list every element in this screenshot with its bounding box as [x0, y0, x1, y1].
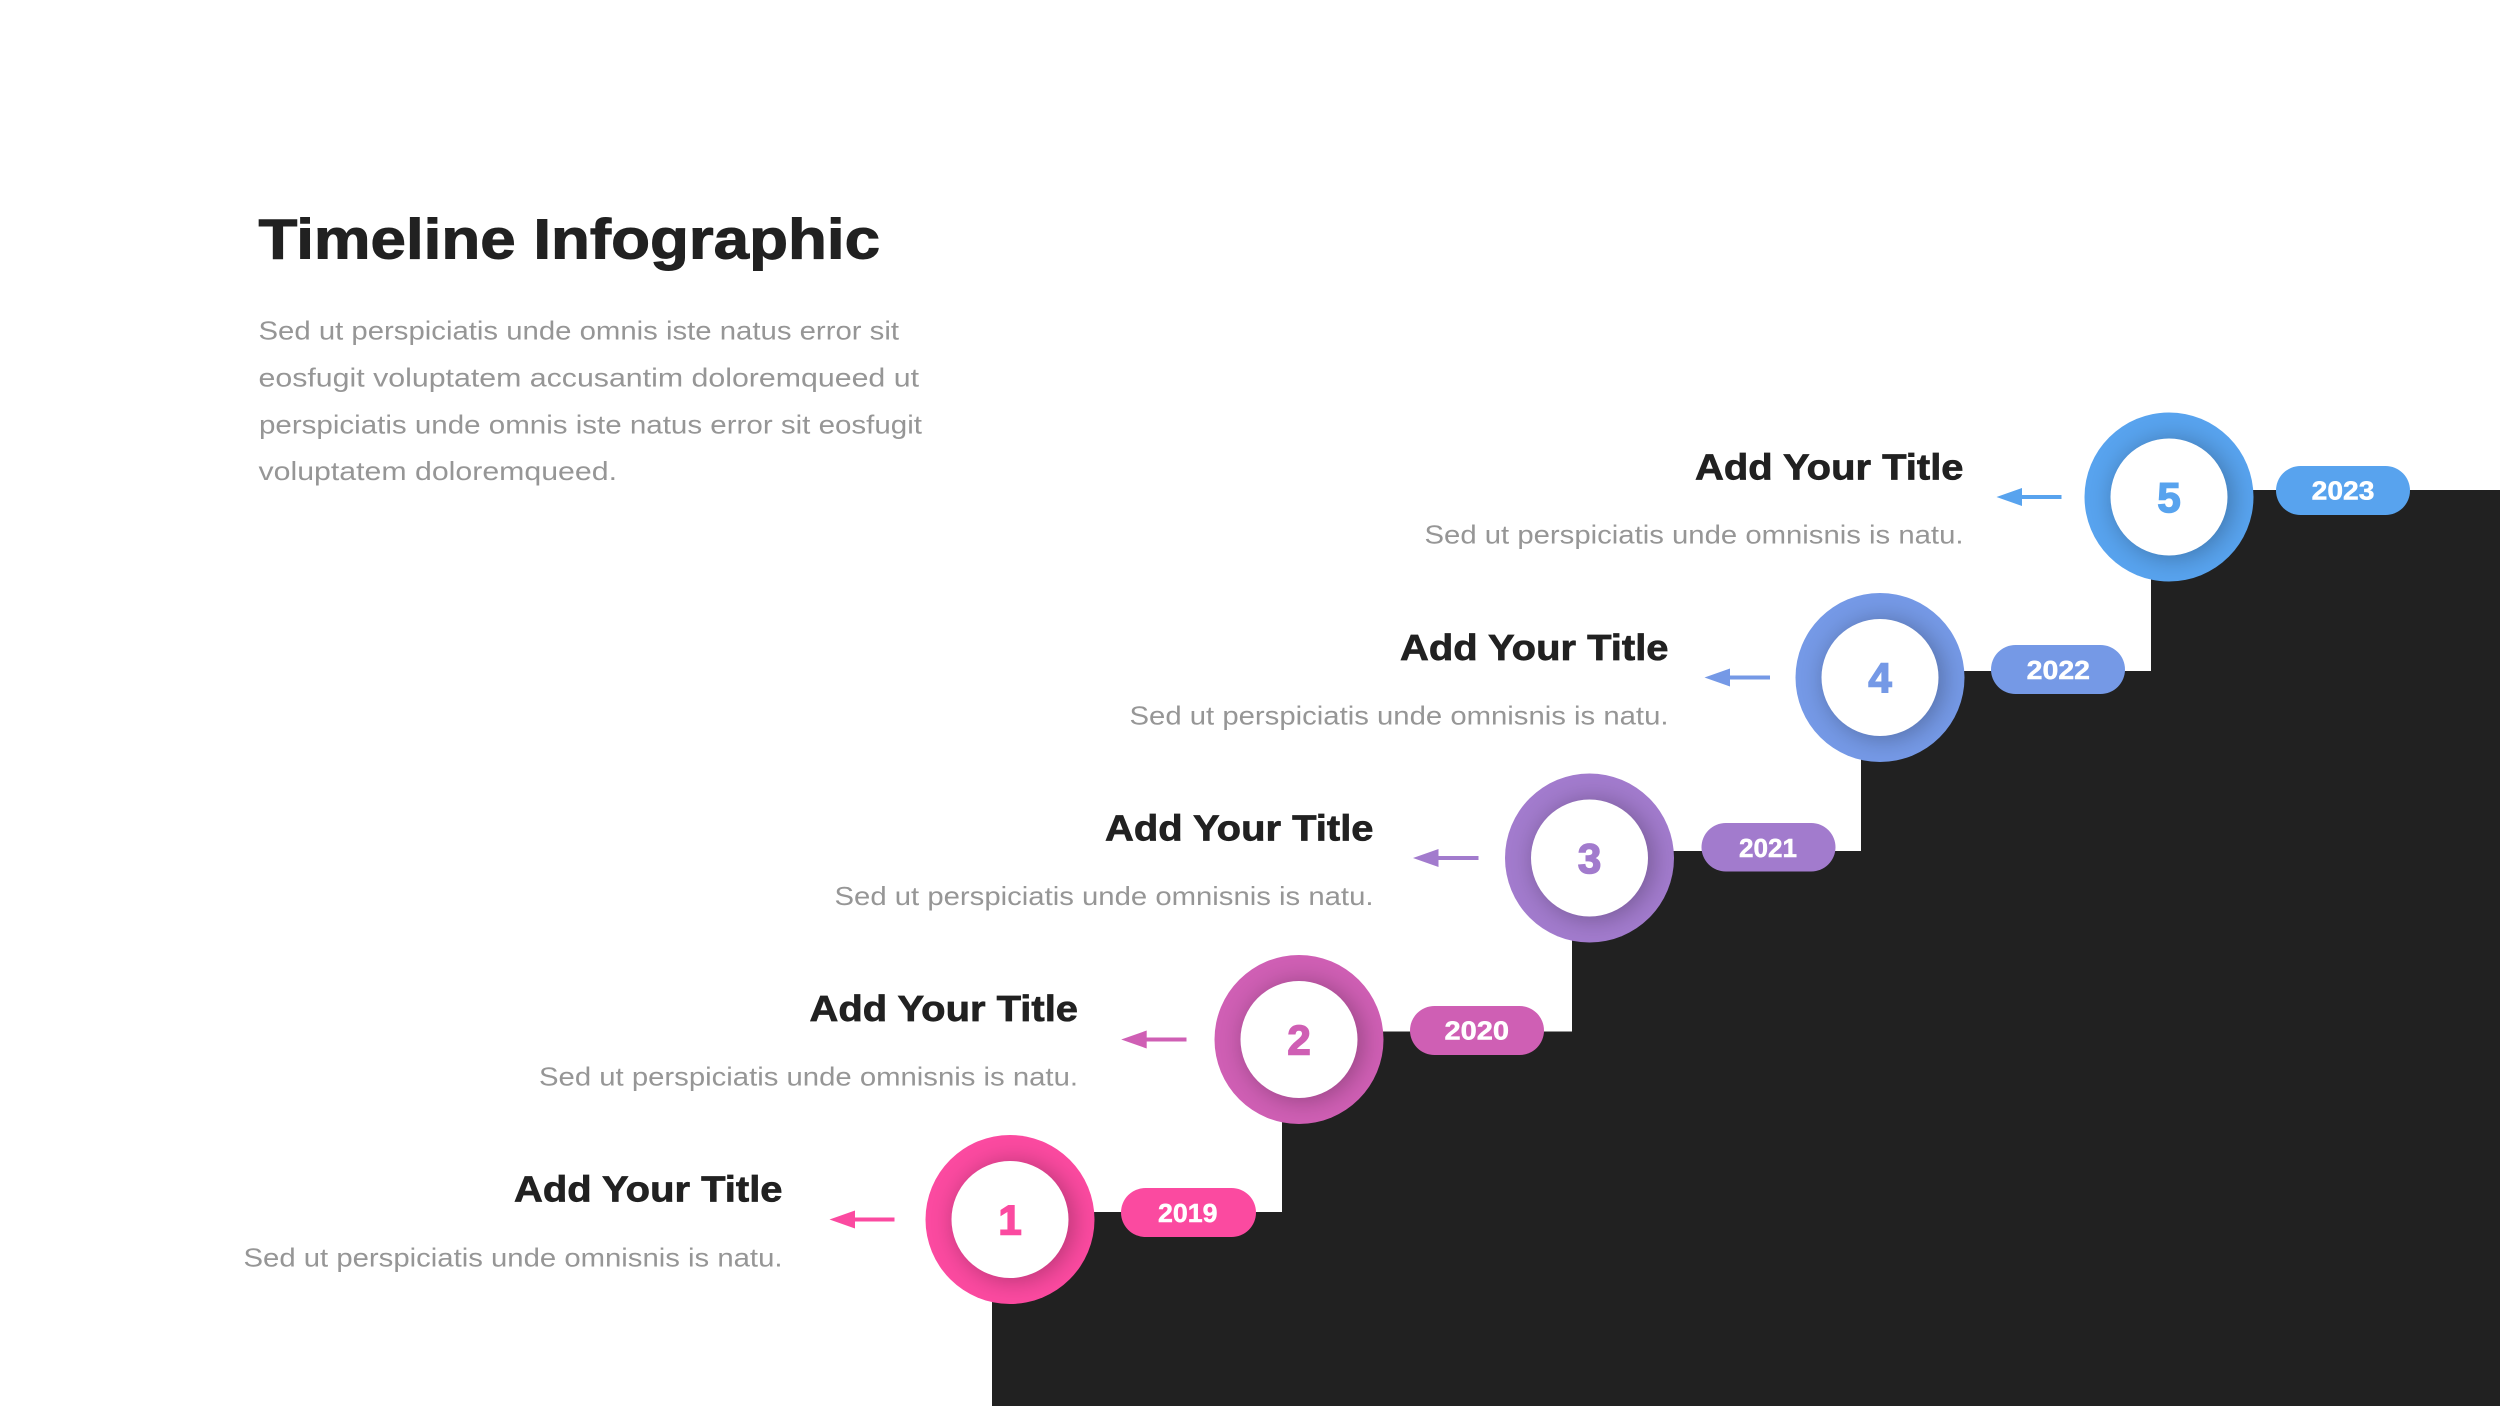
step 4 heading: Add Your Title: [1400, 627, 1668, 668]
step 5: [1424, 412, 2410, 582]
step 1 year pill: 2019: [1158, 1198, 1218, 1228]
step 2 badge: 2: [1287, 1016, 1311, 1064]
dark staircase: [992, 490, 2500, 1406]
step 3 year pill: [1702, 823, 1836, 872]
title: Timeline Infographic: [258, 208, 880, 272]
step 4 year pill: 2022: [2027, 655, 2090, 685]
intro paragraph: [258, 316, 923, 486]
step 1 year pill: [1121, 1188, 1256, 1237]
step 3 badge: [1505, 774, 1674, 942]
step 3 arrow: [1413, 849, 1478, 867]
step 1 badge: [926, 1135, 1094, 1304]
step 5 arrow: [1996, 488, 2062, 506]
step 4 arrow: [1704, 668, 1770, 686]
step 5 description: Sed ut perspiciatis unde omnisnis is natu.: [1424, 520, 1964, 550]
step 1 arrow: [830, 1210, 894, 1228]
step 4 badge: [1796, 593, 1964, 762]
step 3 year pill: 2021: [1739, 833, 1797, 863]
step 2 heading: Add Your Title: [810, 988, 1078, 1029]
step 2 arrow: [1121, 1030, 1186, 1048]
step 3 badge: 3: [1578, 835, 1601, 882]
step 3: [834, 774, 1836, 942]
step 4 year pill: [1991, 645, 2125, 694]
intro paragraph: perspiciatis unde omnis iste natus error sit eosfugit: [259, 410, 923, 440]
step 4 description: Sed ut perspiciatis unde omnisnis is natu.: [1130, 700, 1668, 730]
intro paragraph: voluptatem doloremqueed.: [258, 456, 617, 486]
intro paragraph: eosfugit voluptatem accusantim doloremqueed ut: [258, 362, 920, 392]
step 2: [539, 955, 1544, 1124]
step 4: [1130, 593, 2125, 762]
step 2 year pill: [1410, 1006, 1544, 1055]
step 2 description: Sed ut perspiciatis unde omnisnis is natu.: [539, 1062, 1078, 1092]
step 5 badge: 5: [2157, 474, 2181, 521]
step 5 year pill: [2276, 466, 2410, 515]
step 5 badge: [2084, 412, 2254, 582]
step 2 badge: [1214, 955, 1384, 1124]
step 5 heading: Add Your Title: [1695, 446, 1964, 488]
step 5 year pill: 2023: [2312, 476, 2374, 506]
step 1 heading: Add Your Title: [514, 1168, 782, 1210]
intro paragraph: Sed ut perspiciatis unde omnis iste natus error sit: [258, 316, 900, 346]
step 1 description: Sed ut perspiciatis unde omnisnis is natu.: [244, 1242, 782, 1272]
step 2 year pill: 2020: [1444, 1016, 1509, 1046]
step 3 heading: Add Your Title: [1105, 808, 1374, 848]
step 4 badge: 4: [1868, 654, 1892, 702]
step 1: [244, 1135, 1256, 1304]
step 3 description: Sed ut perspiciatis unde omnisnis is natu.: [834, 881, 1374, 911]
step 1 badge: 1: [998, 1196, 1022, 1244]
